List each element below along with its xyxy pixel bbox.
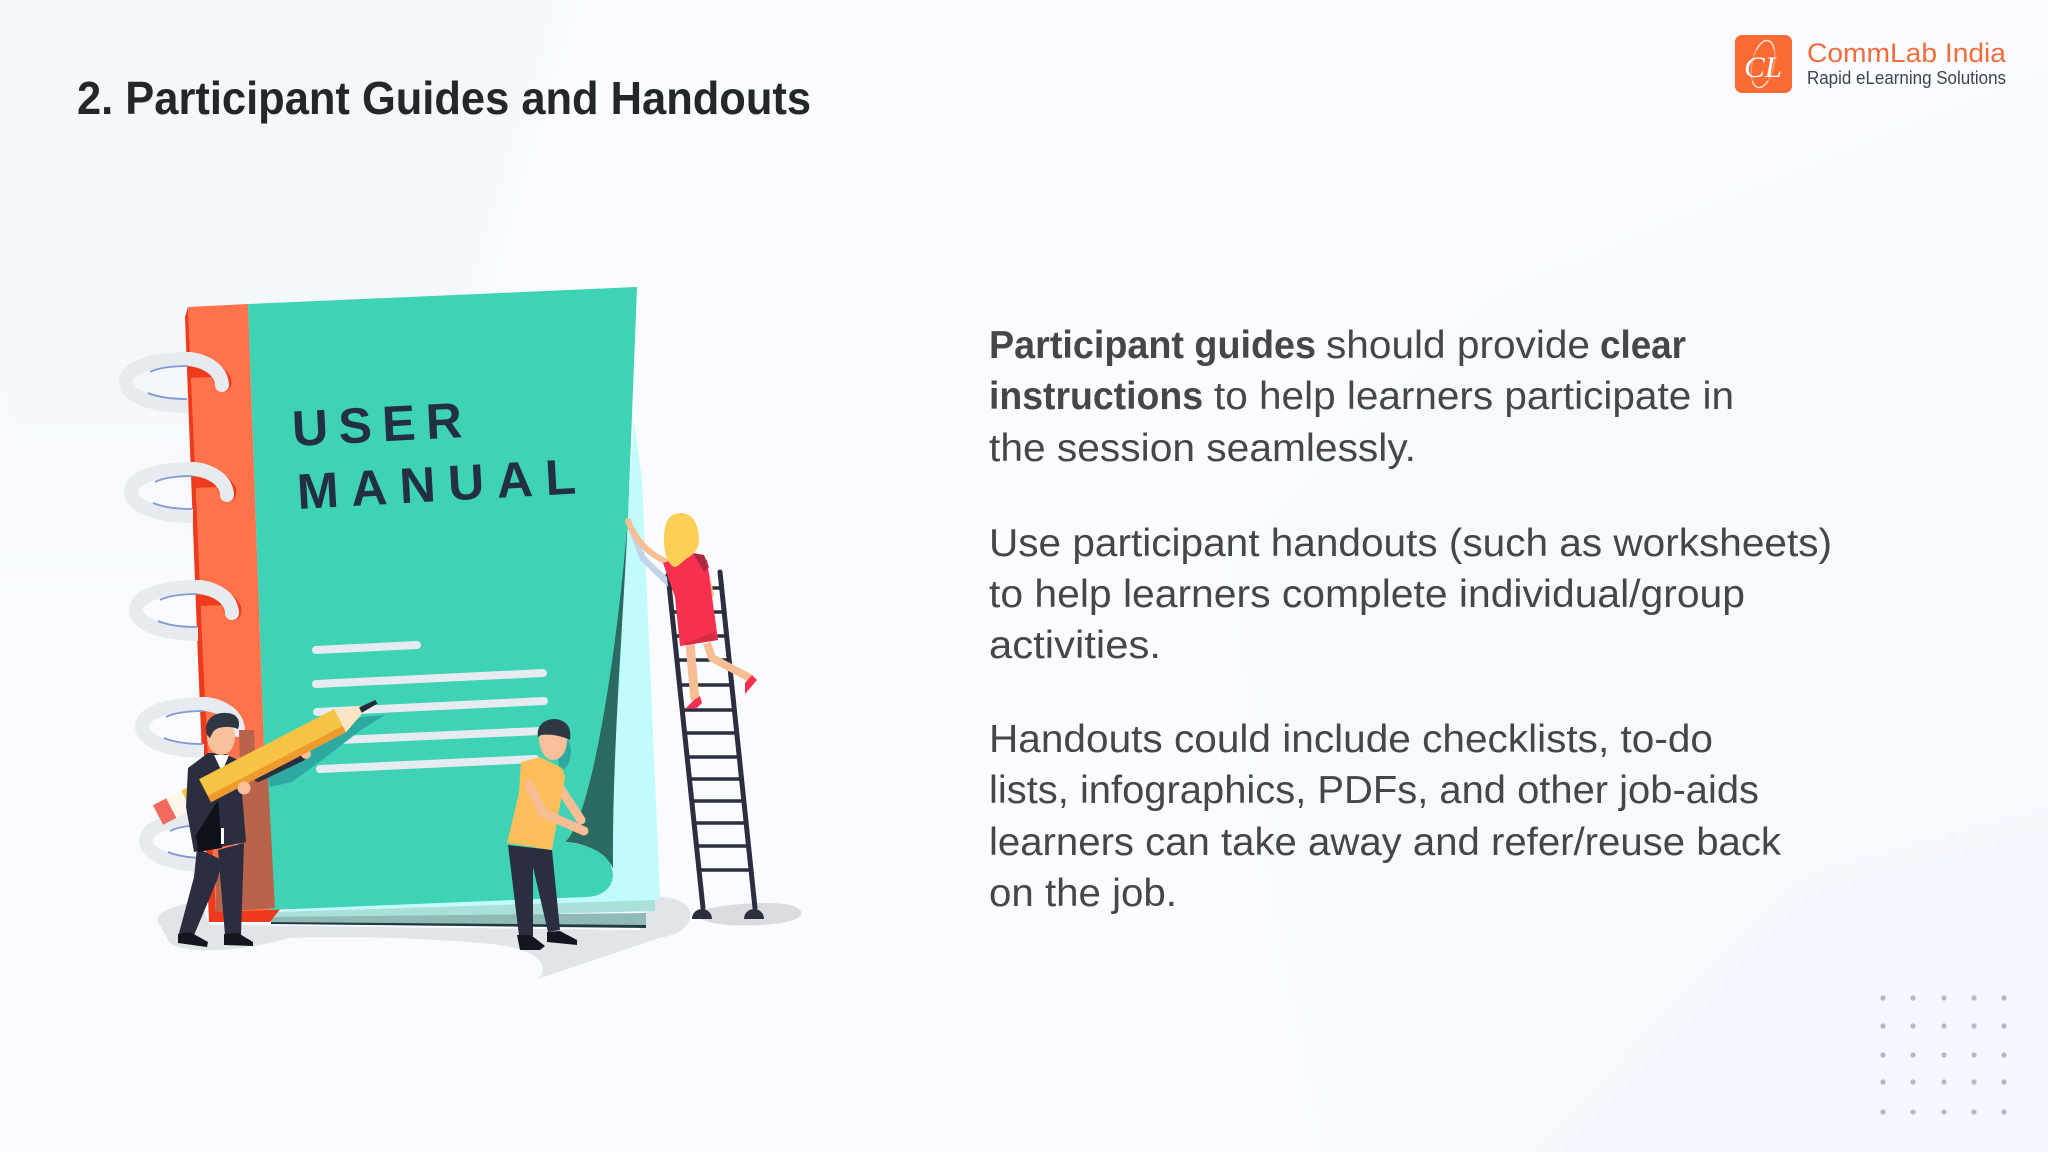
hair [538,719,570,740]
curled page [565,517,628,868]
logo name: CommLab India [1807,38,2007,68]
head shadow [556,740,571,770]
dot grid decoration [1880,995,2007,1115]
logo: CommLab India [1735,35,2007,93]
book [185,287,660,928]
cover title: MANUAL [295,448,577,520]
spine edge [185,307,262,922]
logo tagline: Rapid eLearning Solutions [1807,67,2006,88]
paragraph 2: to help learners complete individual/group [989,573,1745,616]
ground shadow [157,896,690,979]
trousers [508,845,560,936]
face [207,719,235,755]
hand [238,782,250,794]
logo icon: CL [1744,51,1782,84]
paragraph 3 [989,718,1782,915]
paragraph 1 [989,324,1734,470]
pencil rear [153,777,218,825]
shoes [685,696,702,709]
shirt [507,757,565,850]
ring 5 [146,818,249,865]
paragraph 1: instructions [989,375,1203,418]
paragraph 2: activities. [989,624,1161,667]
man in yellow shirt [507,719,584,950]
ladder rungs [669,588,751,870]
other arm [706,572,711,595]
ladder feet [692,909,764,919]
cover text lines [316,645,544,769]
ladder [668,572,764,919]
hair [206,713,239,738]
cover title: USER [291,392,463,457]
book pages [270,420,660,912]
ladder rails [668,572,755,908]
far arm [558,785,581,820]
shirt [214,755,229,772]
ring 1 [126,352,231,406]
paragraph 2 [989,522,1832,667]
man shadow on spine [216,730,275,912]
jacket [186,753,246,852]
paragraph 3: lists, infographics, PDFs, and other job-aids [989,769,1759,812]
illustration: user manual book with figures [126,287,801,979]
arm shadow [630,530,668,587]
shoes [178,932,208,947]
paragraph 2: Use participant handouts (such as worksheets) [989,522,1832,565]
paragraph 3: learners can take away and refer/reuse back [989,821,1782,864]
pencil front [199,690,382,802]
raised arm [628,521,665,561]
legs [178,848,222,940]
legs [690,644,695,700]
paragraph 3: Handouts could include checklists, to-do [989,718,1713,761]
near arm [529,785,584,831]
green cover [248,287,637,910]
logo icon [1735,35,1792,93]
paragraph 1: to help learners participate in [1214,375,1734,418]
pencil shadow [268,715,385,787]
ring 3 [136,580,241,634]
paragraph 1: should provide [1326,324,1590,367]
cover title [291,392,577,520]
paragraph 3: on the job. [989,872,1177,915]
ring 2 [131,462,236,516]
paragraph 1: clear [1600,324,1686,367]
back arm [258,749,311,778]
hair [664,513,699,567]
paragraph 1: Participant guides [989,324,1316,367]
man in suit with pencil [153,690,385,947]
ladder shadow [693,903,801,926]
face [539,733,567,760]
dress [663,553,718,646]
spine [188,304,270,912]
title: 2. Participant Guides and Handouts [77,72,811,124]
paragraph 1: the session seamlessly. [989,427,1416,470]
woman climbing ladder [628,513,757,709]
spiral rings [126,352,249,865]
shoes [517,935,545,950]
ring 4 [142,704,245,751]
